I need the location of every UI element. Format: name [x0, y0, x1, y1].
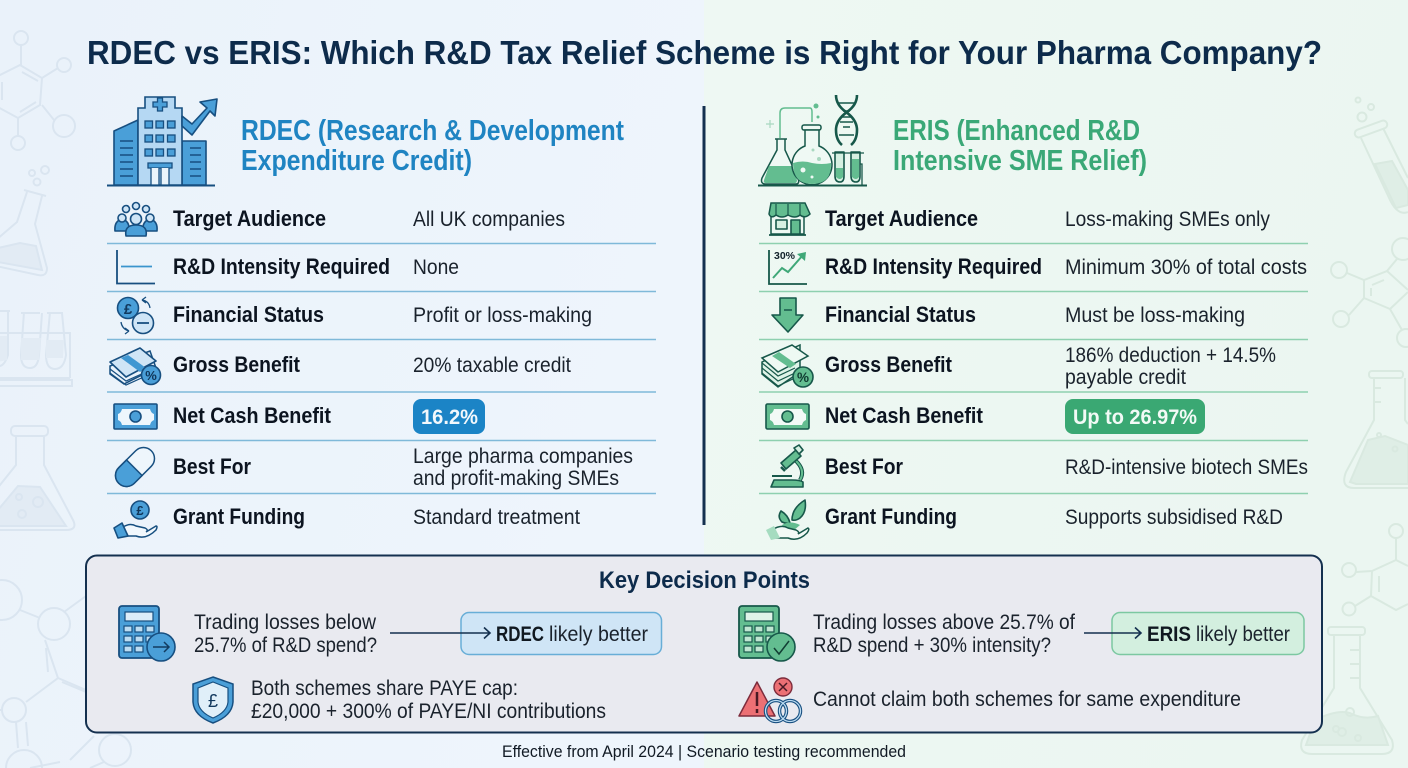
heading: ERIS: [893, 115, 1147, 177]
row: gross benefit: [110, 348, 571, 385]
heading: RDEC: Expenditure Credit): [241, 145, 472, 177]
heading: RDEC: [241, 115, 624, 177]
outcome box: ERIS likely better: ERIS: [1147, 622, 1191, 646]
icon: 30% growth chart: [769, 250, 807, 284]
icon: calculator with check: [739, 606, 795, 661]
row: gross benefit: Gross Benefit: [825, 352, 952, 377]
note: PAYE cap: £20,000 + 300% of PAYE/NI contributions: [251, 699, 606, 723]
row: best for: and profit-making SMEs: [413, 466, 619, 490]
row: R&D intensity: R&D Intensity Required: [173, 254, 390, 279]
icon: cash stack with percent: %: [145, 368, 157, 383]
icon: lab flasks and DNA: [758, 95, 867, 186]
heading: ERIS: ERIS (Enhanced R&D: [893, 115, 1140, 147]
row: financial status: Financial Status: [173, 302, 324, 327]
icon: warning triangle, cross and linked rings: [739, 678, 800, 722]
row: grant funding: [114, 501, 580, 538]
decision: ERIS: R&D spend + 30% intensity?: [813, 633, 1051, 657]
row: best for: Best For: [173, 454, 251, 479]
icon: pound shield: [193, 677, 233, 723]
title: RDEC vs ERIS: Which R&D Tax Relief Scheme is Right for Your Pharma Company?: [87, 34, 1322, 71]
row: gross benefit: Gross Benefit: [173, 352, 300, 377]
decision: RDEC: [119, 606, 662, 661]
heading: RDEC: RDEC (Research & Development: [241, 115, 624, 147]
note: cannot claim both: Cannot claim both schemes for same expenditure: [813, 687, 1241, 711]
row: best for: Best For: [825, 454, 903, 479]
row: gross benefit: 186% deduction + 14.5%: [1065, 343, 1276, 367]
panel: ERIS column: [758, 95, 1308, 540]
icon: down arrow with minus: [772, 298, 803, 332]
badge: up to 26.97%: [1065, 399, 1205, 434]
background pattern: left lab icons: [0, 31, 131, 768]
row: financial status: Profit or loss-making: [413, 303, 592, 327]
row: target audience: [115, 202, 565, 236]
row: grant funding: Grant Funding: [173, 504, 305, 529]
row: R&D intensity: None: [413, 255, 459, 279]
row: target audience: All UK companies: [413, 207, 565, 231]
outcome box: RDEC likely better: [461, 612, 662, 654]
outcome box: ERIS likely better: [1112, 612, 1304, 654]
badge: up to 26.97%: Up to 26.97%: [1073, 405, 1197, 429]
row: financial status: [772, 298, 1245, 332]
background: right half: [704, 0, 1408, 768]
icon: storefront: [769, 203, 810, 235]
row: gross benefit: 20% taxable credit: [413, 353, 571, 377]
row: net cash benefit: Net Cash Benefit: [825, 403, 983, 428]
badge: 16.2%: 16.2%: [421, 405, 478, 429]
row: target audience: Loss-making SMEs only: [1065, 207, 1270, 231]
row: target audience: [769, 203, 1270, 235]
icon: pound and minus coins: [118, 297, 154, 334]
icon: cash stack with percent: [762, 345, 813, 387]
centre divider: [702, 106, 706, 525]
row: financial status: Financial Status: [825, 302, 976, 327]
decision: RDEC: 25.7% of R&D spend?: [194, 633, 377, 657]
icon: banknote: [766, 404, 809, 429]
icon: hand with coin: £: [136, 503, 144, 518]
row: gross benefit: [762, 343, 1276, 389]
decision: ERIS: [739, 606, 1304, 661]
icon: 30% growth chart: 30%: [774, 250, 796, 262]
decision: RDEC: Trading losses below: [194, 610, 376, 634]
row: financial status: [118, 297, 592, 334]
row: net cash benefit: Net Cash Benefit: [173, 403, 331, 428]
row: gross benefit: payable credit: [1065, 365, 1186, 389]
note: cannot claim both: [739, 678, 1241, 722]
row: best for: [111, 443, 633, 491]
icon: cash stack with percent: [110, 348, 160, 385]
panel: key decision points: [86, 556, 1322, 732]
icon: hand with coin: [114, 501, 157, 538]
row: grant funding: [766, 500, 1283, 540]
icon: hand with seedling: [766, 500, 809, 540]
icon: flat line chart: [117, 250, 155, 284]
row: grant funding: Standard treatment: [413, 505, 580, 529]
icon: hospital with rising arrow: [107, 97, 217, 186]
icon: people group: [115, 202, 157, 236]
badge: 16.2%: [413, 399, 485, 434]
footer note: Effective from April 2024 | Scenario testing recommended: [502, 743, 906, 761]
heading: key decision points: Key Decision Points: [599, 567, 810, 594]
row: R&D intensity: Minimum 30% of total costs: [1065, 255, 1307, 279]
heading: ERIS: Intensive SME Relief): [893, 145, 1147, 177]
icon: banknote: [114, 404, 157, 429]
row: R&D intensity: R&D Intensity Required: [825, 254, 1042, 279]
row: net cash benefit: [766, 399, 1205, 434]
row: best for: [771, 445, 1308, 487]
icon: pound and minus coins: £: [124, 301, 133, 318]
background pattern: right lab icons: [1301, 98, 1408, 754]
row: R&D intensity: [769, 250, 1307, 284]
row: grant funding: Supports subsidised R&D: [1065, 505, 1283, 529]
outcome box: RDEC likely better: RDEC: [496, 622, 544, 646]
outcome box: RDEC likely better: likely better: [549, 622, 648, 646]
row: best for: Large pharma companies: [413, 444, 633, 468]
note: PAYE cap: Both schemes share PAYE cap:: [251, 676, 518, 700]
row: financial status: Must be loss-making: [1065, 303, 1245, 327]
decision: ERIS: Trading losses above 25.7% of: [813, 610, 1075, 634]
arrow: to ERIS: [1084, 628, 1141, 638]
outcome box: ERIS likely better: likely better: [1196, 622, 1290, 646]
note: PAYE cap: [193, 676, 606, 723]
row: best for: R&D-intensive biotech SMEs: [1065, 455, 1308, 479]
panel: RDEC column: [107, 97, 656, 538]
row: target audience: Target Audience: [825, 206, 978, 231]
icon: cash stack with percent: %: [797, 370, 809, 385]
row: R&D intensity: [117, 250, 459, 284]
arrow: to RDEC: [390, 628, 490, 638]
row: net cash benefit: [114, 399, 485, 434]
background: left half: [0, 0, 704, 768]
icon: calculator with arrow: [119, 606, 175, 661]
icon: microscope: [771, 445, 803, 487]
row: target audience: Target Audience: [173, 206, 326, 231]
row: grant funding: Grant Funding: [825, 504, 957, 529]
icon: capsule: [111, 443, 159, 491]
icon: pound shield: £: [208, 691, 218, 711]
